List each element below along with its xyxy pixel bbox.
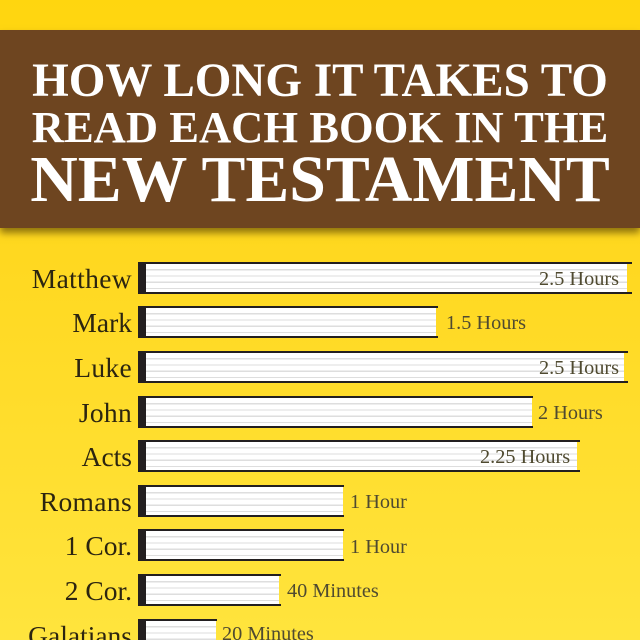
row: Acts: Acts (82, 441, 132, 472)
row: Romans (40, 485, 407, 517)
row: Matthew: 2.5 Hours (539, 268, 619, 290)
row: Romans: Romans (40, 486, 132, 517)
row: 2 Cor.: 2 Cor. (65, 575, 132, 606)
row: John (79, 396, 603, 428)
row: Mark: 1.5 Hours (446, 312, 526, 334)
row: Matthew: Matthew (32, 263, 132, 294)
row: 1 Cor.: 1 Cor. (65, 530, 132, 561)
row: Mark (72, 306, 526, 338)
row: Galatians (28, 619, 314, 640)
row: John: 2 Hours (538, 402, 603, 424)
row: 2 Cor.: 40 Minutes (287, 580, 379, 602)
bar chart: reading time per book (28, 262, 632, 640)
title banner (0, 30, 640, 228)
title line 3: NEW TESTAMENT (30, 143, 610, 216)
row: 1 Cor. (65, 529, 407, 561)
row: Luke: Luke (74, 352, 132, 383)
row: Matthew (32, 262, 632, 294)
row: Luke: 2.5 Hours (539, 357, 619, 379)
row: Luke (74, 351, 628, 383)
row: Mark: Mark (72, 307, 132, 338)
row: Romans: 1 Hour (350, 491, 407, 513)
row: Acts: 2.25 Hours (480, 446, 570, 468)
row: John: John (79, 397, 132, 428)
row: 2 Cor. (65, 574, 379, 606)
title line 2: READ EACH BOOK IN THE (32, 102, 608, 152)
row: 1 Cor.: 1 Hour (350, 536, 407, 558)
title line 1: HOW LONG IT TAKES TO (32, 55, 608, 107)
row: Acts (82, 440, 580, 472)
